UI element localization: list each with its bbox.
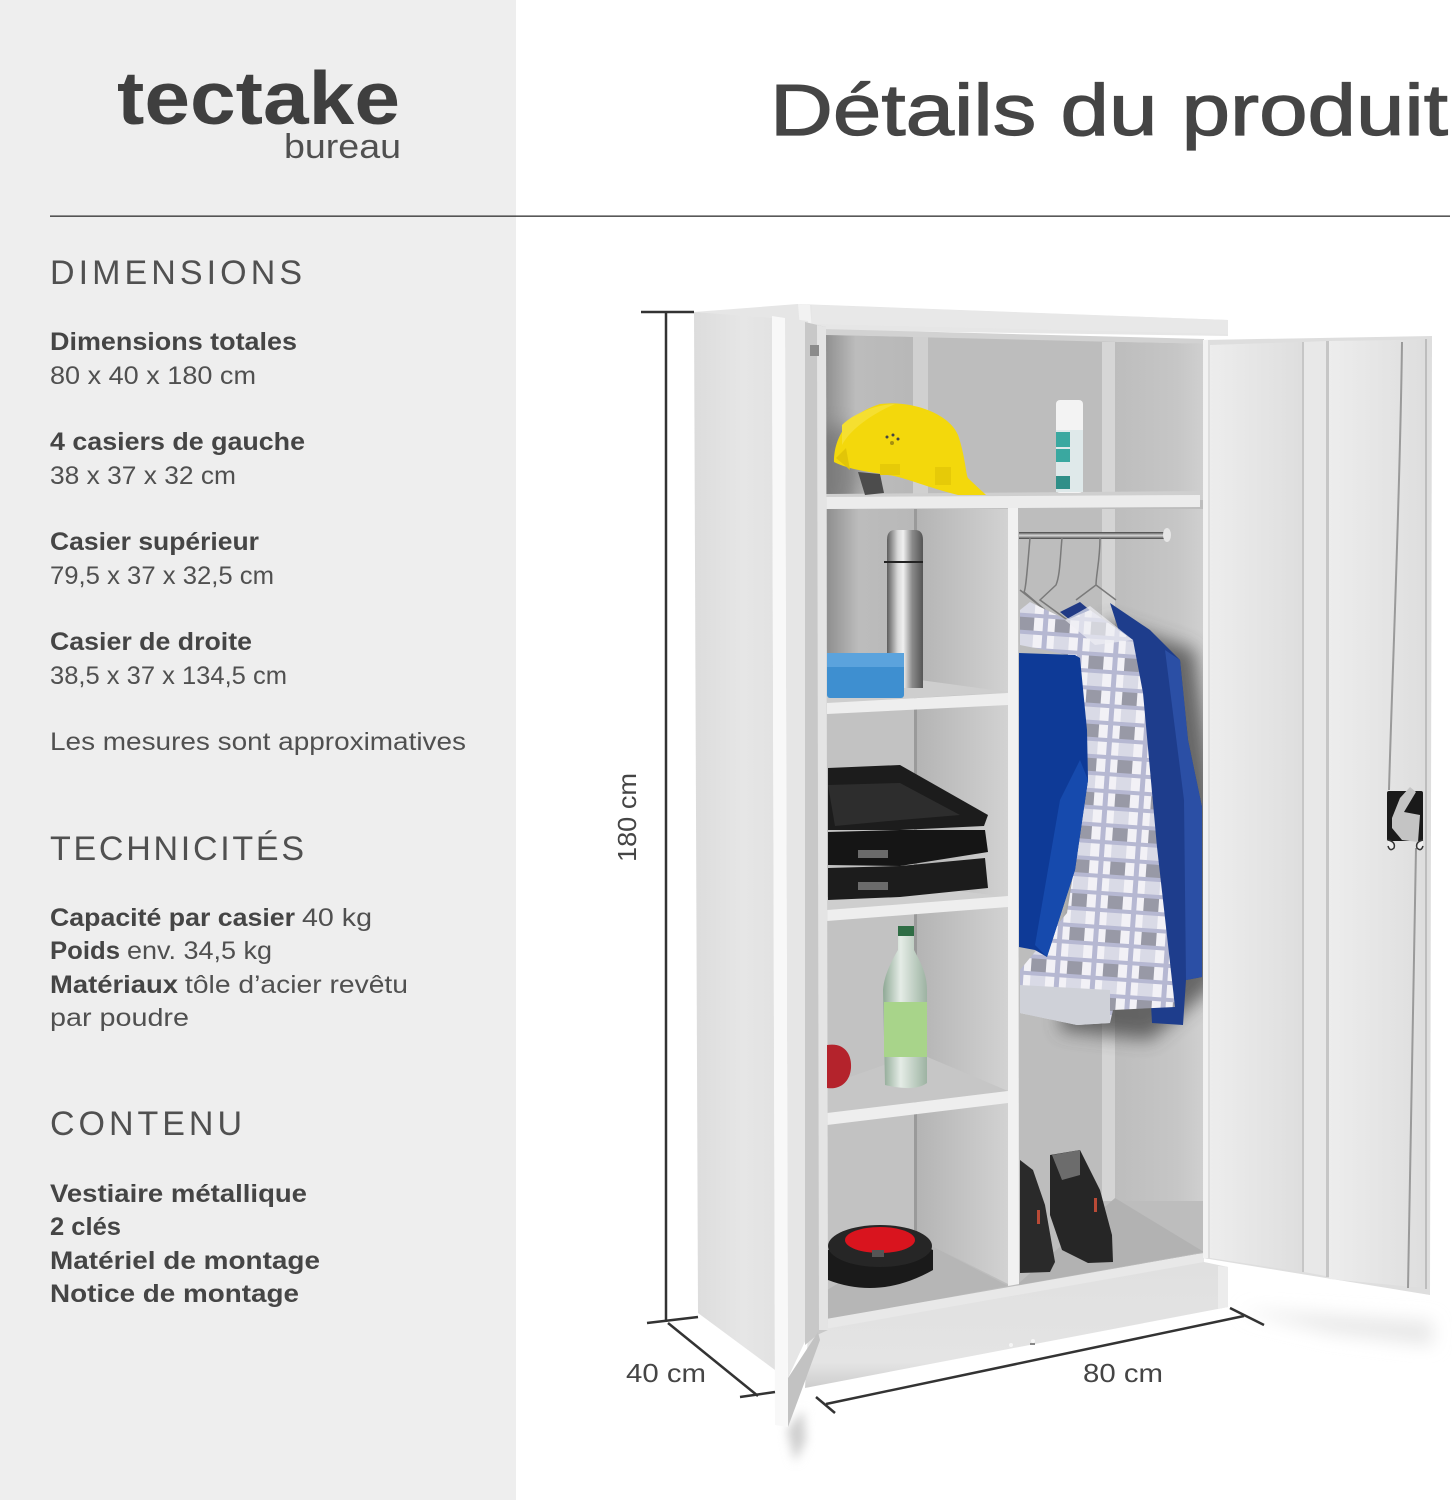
text block: upper compartment: 79,5 x 37 x 32,5 cm [50,562,274,590]
glass bottle [883,926,927,1088]
dimension: height 180 cm [612,312,698,1323]
text block: contents list: Vestiaire métallique [50,1180,307,1208]
text block: upper compartment: Casier supérieur [50,528,259,556]
door lock [1387,787,1423,850]
shelf 2 [827,680,1008,704]
logo: tectake bureau [117,56,401,166]
floor left [827,1237,1008,1320]
text block: total dimensions: 80 x 40 x 180 cm [50,362,256,390]
shelf 3 [827,886,1008,910]
logo: tectake bureau: bureau [284,128,401,166]
black document trays [828,765,988,900]
text block: right compartment: 38,5 x 37 x 134,5 cm [50,662,287,690]
text block: total dimensions: Dimensions totales [50,328,297,356]
text block: contents list [50,1180,320,1308]
text block: upper compartment [50,528,274,590]
section: contents [50,1105,320,1308]
right compartment back wall [1018,509,1204,1254]
plaid shirt [1020,602,1175,1025]
logo: tectake bureau: tectake [117,56,400,140]
text block: contents list: 2 clés [50,1213,121,1241]
heading: technical details: TECHNICITÉS [50,830,304,868]
cabinet side panel [694,312,775,1370]
text block: technical list: tôle d’acier revêtu [185,971,408,999]
blue trousers [1019,653,1088,957]
text block: contents list: Notice de montage [50,1280,299,1308]
text block: technical list: par poudre [50,1004,189,1032]
text block: technical list: 40 kg [302,904,372,932]
left compartment back wall [827,509,917,1319]
upper bay shadow behind helmet [826,420,870,494]
dimension: height 180 cm: 180 cm [612,773,642,862]
upper back wall [825,335,913,500]
red apple [827,1045,851,1088]
header rule [50,216,1450,217]
text block: technical list: env. 34,5 kg [127,937,272,965]
spray can [1056,400,1083,493]
heading: contents: CONTENU [50,1105,242,1143]
blue lunch box [827,653,904,698]
text block: right compartment [50,628,287,690]
text block: left compartments [50,428,305,490]
product image: metal locker [694,304,1432,1462]
plinth base [805,1253,1228,1388]
left door [772,316,828,1427]
text block: contents list: Matériel de montage [50,1247,320,1275]
section: dimensions [50,254,466,756]
left compartment side wall [917,509,1008,1284]
right door [1203,336,1432,1295]
text block: right compartment: Casier de droite [50,628,252,656]
blue jacket [1110,603,1202,1025]
vertical divider [1008,508,1019,1286]
cable reel [828,1225,933,1288]
heading: dimensions: DIMENSIONS [50,254,302,292]
clothes rail [1019,528,1171,542]
dimension: width 80 cm [816,1308,1264,1413]
text block: left compartments: 38 x 37 x 32 cm [50,462,236,490]
dimension: depth 40 cm: 40 cm [626,1358,706,1388]
shelf 4 [827,1053,1008,1113]
steel thermos [884,530,923,688]
text block: technical list: Matériaux [50,971,178,999]
section: technical details [50,830,408,1032]
text block: left compartments: 4 casiers de gauche [50,428,305,456]
floor right [1019,1198,1204,1285]
door wire rods [1389,342,1416,1288]
cabinet interior [807,335,1215,1320]
work boots [1020,1150,1113,1273]
cabinet top [694,304,1228,345]
clothes shadow [1060,620,1215,1040]
title: Détails du produit [770,71,1448,151]
yellow hard hat [834,403,986,495]
clothes [1019,602,1202,1025]
text block: technical list: Capacité par casier [50,904,295,932]
text block: technical list: Poids [50,937,120,965]
coat hangers [1020,538,1116,655]
text block: technical list [50,904,408,1032]
top shelf [826,491,1200,498]
panel: left grey sidebar [0,0,516,1500]
floor shadows [787,1310,1432,1462]
text block: total dimensions [50,328,297,390]
dimension: width 80 cm: 80 cm [1083,1358,1163,1388]
text block: note: Les mesures sont approximatives [50,728,466,756]
dimension: depth 40 cm [626,1323,775,1397]
interior backing [825,335,1204,1320]
